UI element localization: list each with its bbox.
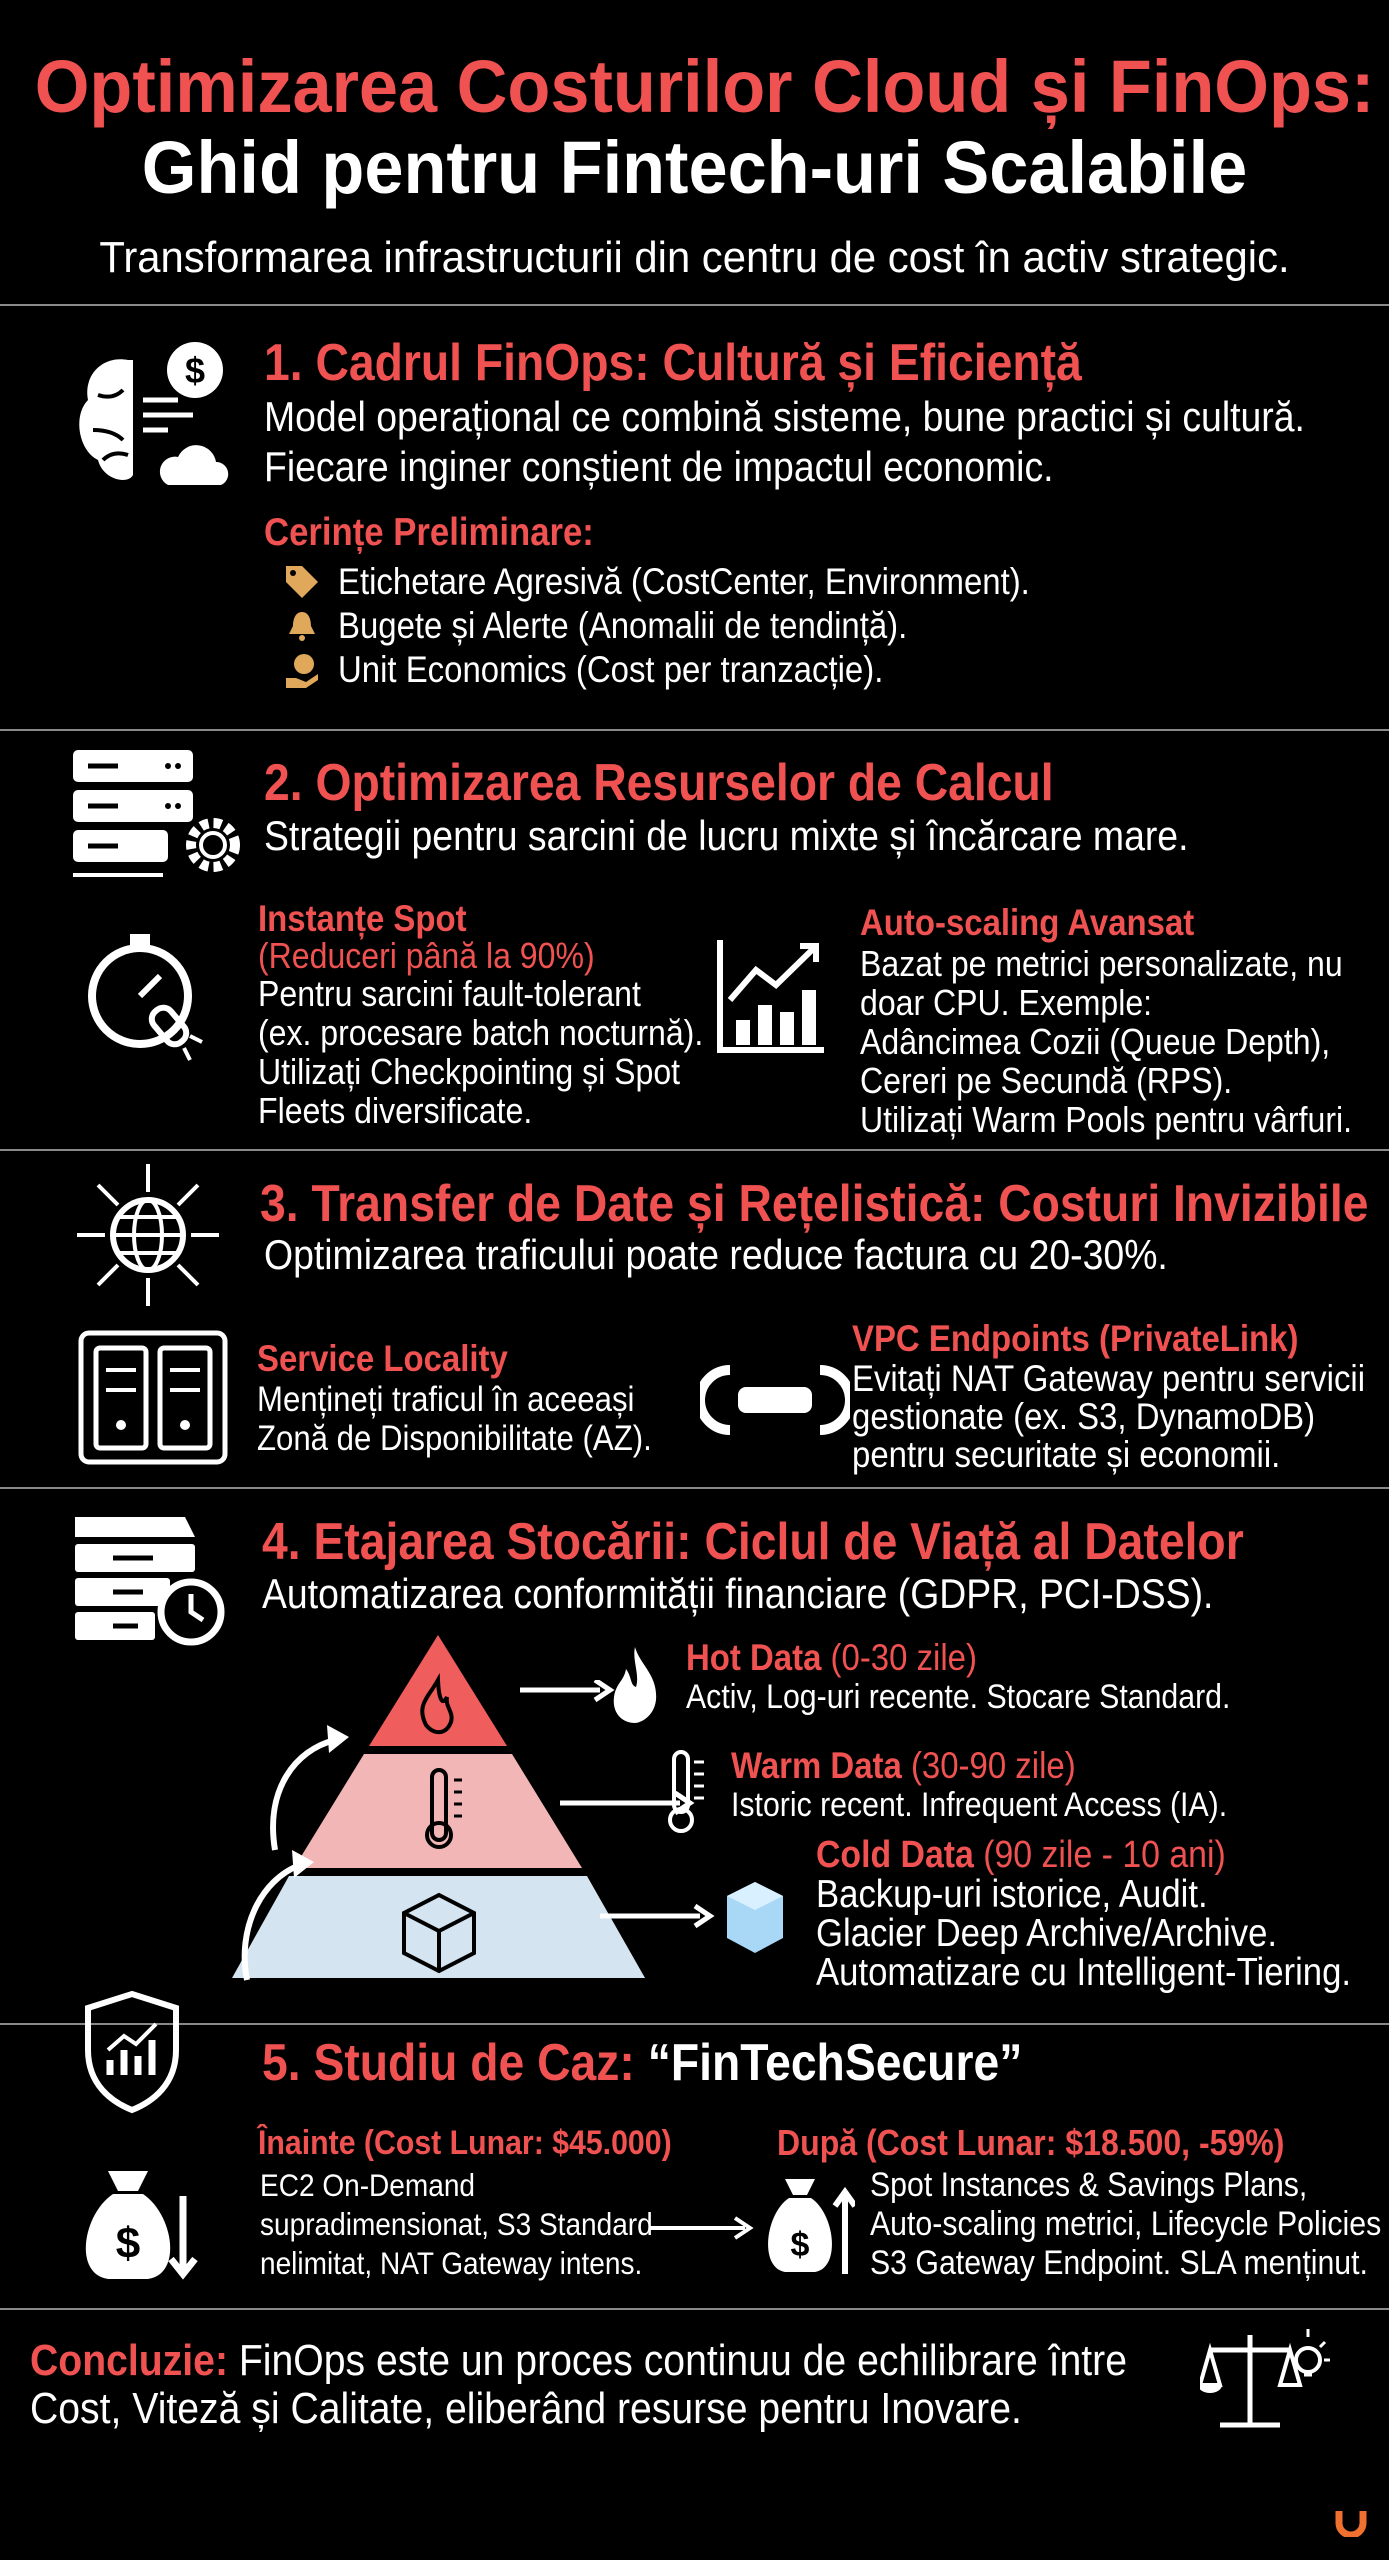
- icon: money bag up: [768, 2179, 855, 2274]
- panel: before: EC2 On-Demand: [260, 2167, 475, 2203]
- label: hot: Activ, Log-uri recente. Stocare Standard.: [686, 1678, 1230, 1716]
- panel: after: După (Cost Lunar: $18.500, -59%): [777, 2122, 1284, 2163]
- subpanel: autoscaling: [717, 902, 1352, 1140]
- panel: after: Spot Instances & Savings Plans,: [870, 2166, 1307, 2204]
- arrow: before to after: [650, 2216, 754, 2240]
- conclusion: Concluzie: FinOps este un proces continuu de echilibrare între: [30, 2336, 1127, 2385]
- subpanel: autoscaling: doar CPU. Exemple:: [860, 982, 1152, 1023]
- icon: money bag up: $: [791, 2226, 810, 2264]
- arrows: to labels: [520, 1680, 714, 1928]
- icon: flame: [614, 1647, 656, 1723]
- subpanel: vpc endpoints: pentru securitate și economii.: [852, 1434, 1280, 1475]
- panel: before: [86, 2124, 672, 2281]
- label: cold: [816, 1834, 1351, 1994]
- section 1: [79, 334, 1305, 690]
- icon: servers gear: [73, 750, 240, 877]
- prerequisites: Bugete și Alerte (Anomalii de tendință).: [338, 605, 907, 646]
- panel: after: Auto-scaling metrici, Lifecycle Policies: [870, 2205, 1381, 2243]
- label: warm: Istoric recent. Infrequent Access (IA).: [731, 1786, 1227, 1824]
- arrows: curved upward: [242, 1725, 349, 1981]
- text 1: Fiecare inginer conștient de impactul economic.: [264, 443, 1054, 490]
- label: hot: [686, 1637, 1230, 1716]
- icon: brain dollar cloud: $: [185, 350, 205, 391]
- icon: growth chart: [717, 940, 824, 1053]
- panel: after: S3 Gateway Endpoint. SLA menținut.: [870, 2244, 1368, 2282]
- heading 5: 5. Studiu de Caz: “FinTechSecure”: [262, 2034, 1022, 2092]
- icon: shield chart: [85, 1990, 179, 2114]
- section 2: [73, 750, 1352, 1140]
- icon: thermometer: [668, 1750, 704, 1833]
- label: hot: Hot Data (0-30 zile): [686, 1637, 977, 1678]
- panel: before: nelimitat, NAT Gateway intens.: [260, 2245, 642, 2281]
- icon: ice cube: [727, 1882, 783, 1953]
- subpanel: autoscaling: Adâncimea Cozii (Queue Depth),: [860, 1021, 1330, 1062]
- icon: tag: [286, 566, 318, 598]
- prerequisites: Etichetare Agresivă (CostCenter, Environment).: [338, 561, 1030, 602]
- icon: money bag down: $: [116, 2219, 140, 2268]
- chart: storage pyramid: [232, 1635, 645, 1978]
- subpanel: spot instances: Fleets diversificate.: [258, 1090, 532, 1131]
- text 3: Optimizarea traficului poate reduce factura cu 20-30%.: [264, 1231, 1168, 1278]
- subpanel: service locality: Zonă de Disponibilitate (AZ).: [257, 1419, 652, 1458]
- subpanel: autoscaling: Auto-scaling Avansat: [860, 902, 1194, 943]
- text 2: Strategii pentru sarcini de lucru mixte și încărcare mare.: [264, 812, 1188, 859]
- panel: before: supradimensionat, S3 Standard: [260, 2206, 653, 2242]
- subpanel: spot instances: (Reduceri până la 90%): [258, 935, 595, 976]
- title: [35, 45, 1374, 209]
- conclusion: [30, 2336, 1127, 2433]
- icon: storage drawers clock: [75, 1517, 224, 1646]
- label: cold: Cold Data (90 zile - 10 ani): [816, 1834, 1226, 1876]
- prerequisites: [264, 511, 1030, 690]
- subpanel: spot instances: Pentru sarcini fault-tolerant: [258, 973, 641, 1014]
- panel: before: Înainte (Cost Lunar: $45.000): [258, 2124, 672, 2162]
- section 5: [85, 1990, 1381, 2282]
- heading 4: 4. Etajarea Stocării: Ciclul de Viață al Datelor: [262, 1513, 1244, 1571]
- title: Ghid pentru Fintech-uri Scalabile: [142, 126, 1247, 209]
- subpanel: spot instances: Instanțe Spot: [258, 898, 467, 939]
- icon: server racks: [78, 1330, 228, 1464]
- icon: stopwatch: [88, 934, 203, 1061]
- icon: brain dollar cloud: [79, 342, 228, 485]
- label: warm: [731, 1745, 1227, 1824]
- heading 1: 1. Cadrul FinOps: Cultură și Eficiență: [264, 334, 1082, 392]
- text 1: Model operațional ce combină sisteme, bune practici și cultură.: [264, 393, 1305, 440]
- icon: private link: [700, 1365, 850, 1435]
- subpanel: spot instances: [88, 898, 703, 1131]
- subpanel: service locality: [78, 1330, 652, 1464]
- conclusion: Cost, Viteză și Calitate, eliberând resurse pentru Inovare.: [30, 2384, 1022, 2433]
- heading 3: 3. Transfer de Date și Rețelistică: Costuri Invizibile: [260, 1175, 1369, 1233]
- icon: money hand: [286, 654, 318, 688]
- icon: globe arrows: [77, 1164, 219, 1306]
- prerequisites: Unit Economics (Cost per tranzacție).: [338, 649, 883, 690]
- subpanel: vpc endpoints: Evitați NAT Gateway pentru servicii: [852, 1358, 1365, 1399]
- subpanel: vpc endpoints: VPC Endpoints (PrivateLink): [852, 1318, 1298, 1359]
- text 1: [264, 393, 1305, 490]
- icon: money bag down: [86, 2171, 198, 2280]
- section 3: [77, 1164, 1369, 1475]
- heading 2: 2. Optimizarea Resurselor de Calcul: [264, 754, 1054, 812]
- subpanel: spot instances: (ex. procesare batch nocturnă).: [258, 1012, 703, 1053]
- text 4: Automatizarea conformității financiare (GDPR, PCI-DSS).: [262, 1570, 1213, 1617]
- icon: bell: [289, 612, 315, 641]
- panel: after: [768, 2122, 1381, 2282]
- subpanel: service locality: Service Locality: [257, 1338, 508, 1379]
- subtitle: Transformarea infrastructurii din centru de cost în activ strategic.: [99, 233, 1290, 282]
- prerequisites: Cerințe Preliminare:: [264, 511, 594, 554]
- label: warm: Warm Data (30-90 zile): [731, 1745, 1076, 1786]
- icon: scale with bulb: [1200, 2325, 1330, 2435]
- label: cold: Backup-uri istorice, Audit.: [816, 1873, 1208, 1916]
- subpanel: autoscaling: Bazat pe metrici personalizate, nu: [860, 943, 1343, 984]
- subpanel: vpc endpoints: gestionate (ex. S3, DynamoDB): [852, 1396, 1315, 1437]
- subpanel: autoscaling: Utilizați Warm Pools pentru vârfuri.: [860, 1099, 1352, 1140]
- label: cold: Automatizare cu Intelligent-Tiering.: [816, 1951, 1351, 1994]
- section 4: [75, 1513, 1351, 1994]
- subpanel: autoscaling: Cereri pe Secundă (RPS).: [860, 1060, 1232, 1101]
- subpanel: spot instances: Utilizați Checkpointing și Spot: [258, 1051, 680, 1092]
- label: cold: Glacier Deep Archive/Archive.: [816, 1912, 1277, 1955]
- title: Optimizarea Costurilor Cloud și FinOps:: [35, 45, 1374, 128]
- subpanel: vpc endpoints: [700, 1318, 1365, 1475]
- subpanel: service locality: Mențineți traficul în aceeași: [257, 1380, 634, 1419]
- logo: [1335, 2505, 1367, 2537]
